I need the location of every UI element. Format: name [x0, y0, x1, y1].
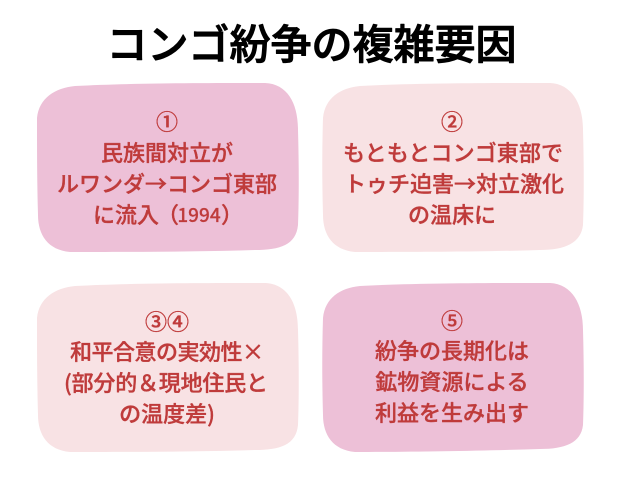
panel: cause 5: [322, 283, 584, 452]
panel: cause 2: [322, 83, 584, 252]
panel: cause 1: ルワンダ→コンゴ東部: [57, 167, 277, 199]
number: ①: [156, 105, 178, 137]
panel: cause 1: ）: [221, 198, 243, 230]
panel: cause 2: トゥチ迫害→対立激化: [344, 167, 564, 199]
panel: cause 5: 利益を生み出す: [375, 396, 529, 428]
text: 和平合意の実効性×: [70, 335, 264, 367]
number: ⑤: [441, 304, 463, 336]
title: コンゴ紛争の複雑要因: [106, 11, 516, 71]
panel: cause 1: [37, 83, 299, 252]
panel: cause 1: に流入: [93, 198, 159, 230]
panel: cause 2: の温床に: [408, 198, 496, 230]
text: もともとコンゴ東部で: [343, 136, 563, 168]
text: 民族間対立が: [101, 136, 233, 168]
panel: cause 5: 鉱物資源による: [375, 365, 529, 397]
panel: cause 3 and 4: [37, 283, 299, 452]
panel: cause 3 and 4: の温度差): [119, 397, 215, 429]
panel: cause 1: （: [157, 198, 179, 230]
panel: cause 3 and 4: (部分的＆現地住民と: [64, 366, 268, 398]
text: 紛争の長期化は: [375, 334, 529, 366]
number: ③④: [145, 305, 189, 337]
number: ②: [441, 105, 463, 137]
panel: cause 1: 1994: [177, 201, 221, 228]
